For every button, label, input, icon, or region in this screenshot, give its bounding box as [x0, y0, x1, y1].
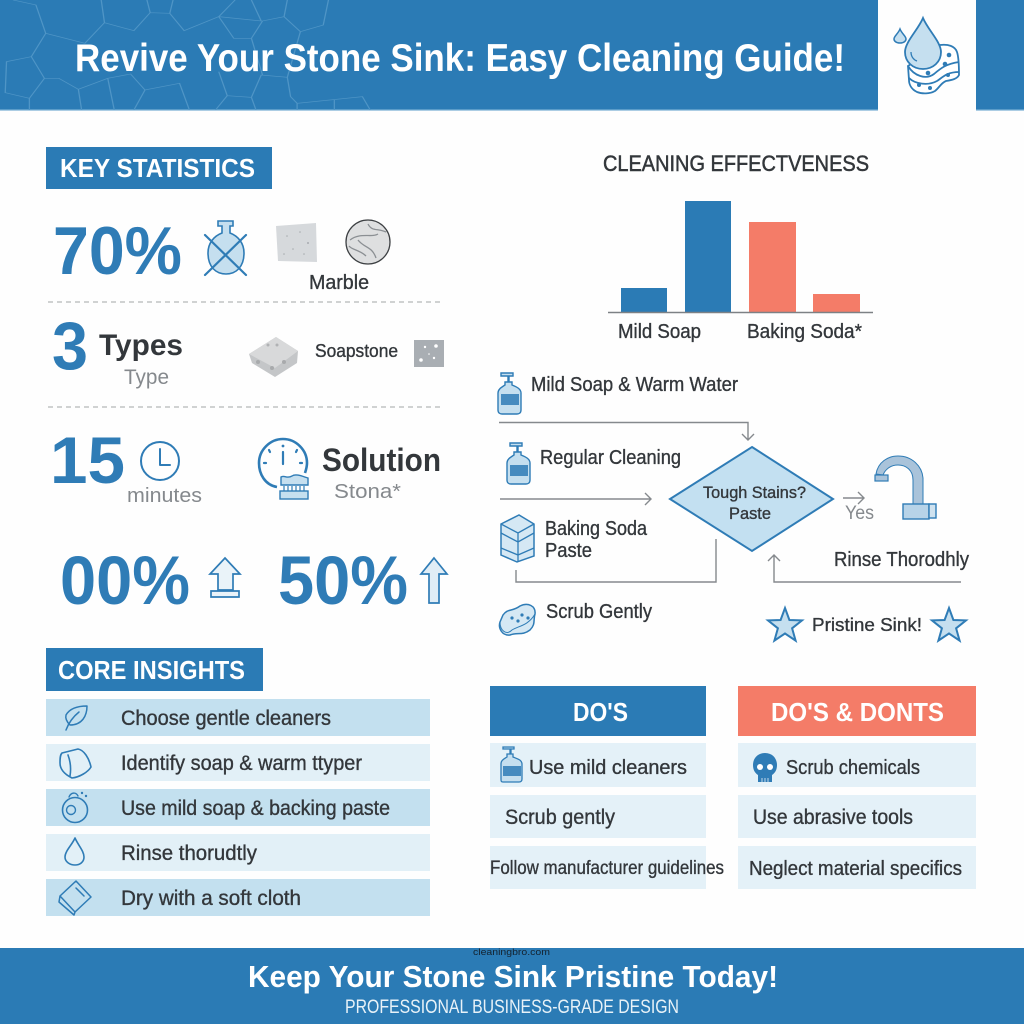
step: scrub gently: Scrub Gently — [546, 601, 652, 623]
step: baking soda paste: Paste — [545, 540, 592, 562]
arrow: regular cleaning to decision — [500, 493, 651, 505]
icon: skull — [753, 753, 777, 782]
stat: 50%: 50% — [278, 542, 408, 619]
panel: do's and don'ts: Use abrasive tools — [753, 806, 913, 829]
arrow: soap to decision — [499, 422, 754, 440]
heading: do's: DO'S — [573, 697, 628, 727]
step: baking soda paste — [501, 515, 648, 562]
panel: key statistics: Type — [124, 366, 169, 389]
insight row 1 — [46, 699, 430, 736]
icon: crossed-out bottle — [205, 221, 246, 275]
footer tagline: PROFESSIONAL BUSINESS-GRADE DESIGN — [345, 997, 679, 1018]
insight row 3 — [46, 789, 430, 826]
icon: timer with brush — [259, 439, 308, 499]
title: Revive Your Stone Sink: Easy Cleaning Guide! — [75, 37, 845, 80]
panel: do's and don'ts — [738, 686, 976, 889]
icon: water drop and sponge — [894, 18, 959, 93]
insight row 4 — [46, 834, 430, 871]
panel: key statistics — [46, 147, 447, 619]
heading: do's and don'ts — [738, 686, 976, 736]
icon: upload arrow — [210, 558, 240, 597]
heading: core insights — [46, 648, 263, 691]
step: scrub gently — [499, 601, 652, 635]
bar chart: cleaning effectiveness: Baking Soda* — [747, 321, 862, 343]
heading: key statistics: KEY STATISTICS — [60, 153, 255, 183]
footer headline: Keep Your Stone Sink Pristine Today! — [248, 959, 778, 994]
stat: 70%: 70% — [53, 213, 182, 289]
panel: key statistics: minutes — [127, 485, 202, 507]
panel: core insights — [46, 648, 430, 916]
flowchart — [498, 373, 969, 641]
arrow: paste connector — [516, 539, 716, 582]
header banner — [0, 0, 1024, 110]
icon: speckled stone — [414, 340, 444, 367]
step: baking soda paste: Baking Soda — [545, 518, 648, 540]
panel: do's: Follow manufacturer guidelines — [490, 858, 724, 879]
panel: do's: Scrub gently — [505, 806, 615, 829]
icon: soap bottle — [501, 747, 522, 782]
icon: up arrow — [421, 558, 447, 603]
footer banner: cleaningbro.com — [473, 947, 550, 958]
decision: tough stains — [670, 447, 833, 551]
step: regular cleaning — [507, 443, 681, 484]
icon: faucet — [875, 456, 936, 519]
bar chart: cleaning effectiveness: Mild Soap — [618, 321, 701, 343]
icon: soapstone block — [249, 337, 298, 377]
insight row 5 — [46, 879, 430, 916]
footer banner — [0, 947, 1024, 1024]
insight row 3: Use mild soap & backing paste — [121, 797, 390, 820]
heading: do's and don'ts: DO'S & DONTS — [771, 697, 944, 727]
label: marble: Marble — [309, 272, 369, 294]
insight row 2: Identify soap & warm ttyper — [121, 752, 362, 775]
label: rinse thoroughly: Rinse Thorodhly — [834, 549, 969, 571]
icon: marble sample — [346, 220, 390, 264]
stat: 00%: 00% — [60, 542, 190, 619]
flowchart: Yes — [845, 503, 874, 524]
insight row 4: Rinse thorudtly — [121, 842, 257, 865]
result: pristine sink: Pristine Sink! — [812, 614, 922, 635]
bar chart: cleaning effectiveness — [603, 151, 873, 343]
decision: tough stains: Tough Stains? — [703, 483, 806, 502]
panel: do's — [490, 686, 724, 889]
insight row 1: Choose gentle cleaners — [121, 707, 331, 730]
arrow: yes — [843, 492, 864, 504]
label: soapstone: Soapstone — [315, 341, 398, 361]
insight row 2 — [46, 744, 430, 781]
chart title: CLEANING EFFECTVENESS — [603, 151, 869, 176]
result: pristine sink — [768, 608, 966, 641]
insight row 5: Dry with a soft cloth — [121, 887, 301, 910]
panel: key statistics: Types — [99, 329, 183, 362]
arrow: rinse to decision — [768, 555, 961, 582]
stat: 15 minutes: 15 — [50, 423, 125, 497]
icon: clock — [141, 442, 179, 480]
step: regular cleaning: Regular Cleaning — [540, 447, 681, 469]
panel: do's and don'ts: Scrub chemicals — [786, 757, 920, 779]
step: mild soap and warm water: Mild Soap & Warm Water — [531, 374, 738, 396]
stat: 3 types: 3 — [52, 308, 88, 384]
icon: granite sample — [276, 223, 317, 262]
heading: do's — [490, 686, 706, 736]
step: mild soap and warm water — [498, 373, 738, 414]
decision: tough stains: Paste — [729, 504, 771, 523]
heading: key statistics — [46, 147, 272, 189]
panel: do's and don'ts: Neglect material specifics — [749, 858, 962, 880]
panel: key statistics: Stona* — [334, 481, 401, 503]
panel: key statistics: Solution — [322, 442, 441, 478]
panel: do's: Use mild cleaners — [529, 757, 687, 779]
heading: core insights: CORE INSIGHTS — [58, 655, 245, 685]
